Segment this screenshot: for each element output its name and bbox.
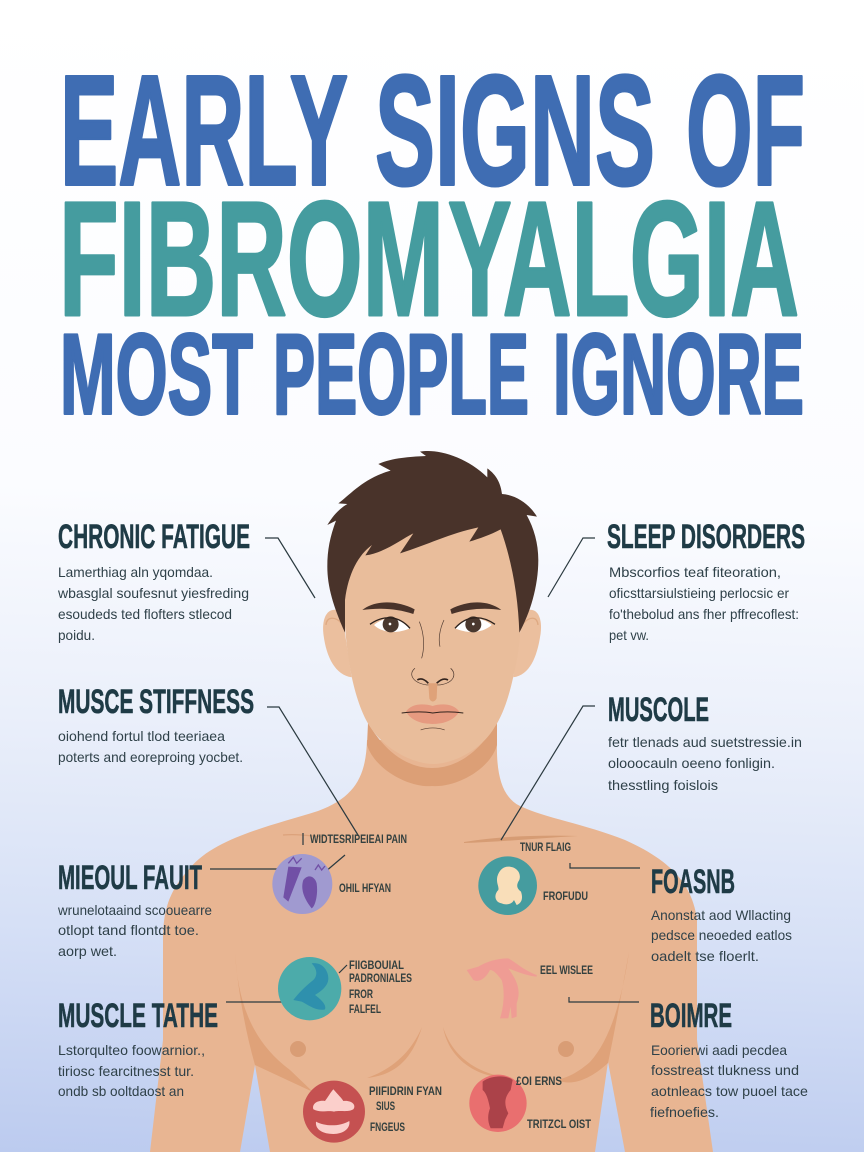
ears [323, 610, 352, 677]
panel: boimre [650, 997, 808, 1120]
panel: chronic fatigue: Lamerthiag aln yqomdaa. [58, 564, 213, 580]
body labels: OHIL HFYAN [339, 883, 391, 895]
panel: boimre: aotnleacs tow puoel tace [651, 1083, 808, 1099]
panel: sleep disorders: oficsttarsiulstieing perlocsic er [609, 585, 789, 601]
face [344, 490, 521, 764]
panel: sleep disorders: fo'thebolud ans fher pffrecoflest: [609, 606, 799, 622]
panel: muscole: fetr tlenads aud suetstressie.in [608, 734, 802, 750]
body labels: FNGEUS [370, 1122, 405, 1134]
panel: muscle tathe: ondb sb ooltdaost an [58, 1083, 184, 1099]
icon: red mouth circle [303, 1081, 365, 1143]
neck shadow [367, 723, 497, 786]
nipples [290, 1041, 306, 1057]
body labels: £OI ERNS [516, 1076, 562, 1088]
icon: teal figure circle [478, 856, 537, 915]
panel: boimre: BOIMRE [650, 997, 732, 1035]
panel: foasnb: pedsce neoeded eatlos [651, 927, 792, 943]
panel: mieoul fauit [57, 859, 212, 959]
body labels: EEL WISLEE [540, 965, 593, 977]
body labels: PIIFIDRIN FYAN [369, 1086, 442, 1098]
icon: red organ circle [469, 1075, 527, 1132]
panel: foasnb: Anonstat aod Wllacting [651, 907, 791, 923]
body labels: FROR [349, 989, 374, 1001]
eyes [374, 619, 410, 632]
collarbones [283, 835, 325, 837]
panel: muscle stiffness: poterts and eoreproing yocbet. [58, 749, 243, 765]
panel: chronic fatigue [57, 518, 250, 643]
chest muscle lines [235, 953, 313, 1092]
title: PEOPLE [273, 312, 529, 438]
panel: mieoul fauit: otlopt tand flontdt toe. [58, 922, 199, 938]
panel: boimre: fiefnoefies. [650, 1104, 719, 1120]
panel: mieoul fauit: wrunelotaaind scoouearre [57, 902, 212, 918]
panel: foasnb: FOASNB [651, 863, 735, 901]
panel: chronic fatigue: wbasglal soufesnut yiesfreding [57, 585, 249, 601]
panel: mieoul fauit: MIEOUL FAUIT [58, 859, 202, 897]
panel: chronic fatigue: CHRONIC FATIGUE [58, 518, 250, 556]
body labels: FROFUDU [543, 891, 588, 903]
panel: muscle tathe: tiriosc fearcitnesst tur. [58, 1063, 194, 1079]
eyebrows [362, 602, 415, 614]
title: EARLY [60, 44, 348, 218]
panel: muscle stiffness: MUSCE STIFFNESS [58, 683, 254, 721]
panel: boimre: fosstreast tlukness und [651, 1062, 799, 1078]
title [59, 44, 805, 438]
icon: chest illustrations [272, 854, 537, 1143]
body labels: WIDTESRIPEIEAI PAIN [310, 834, 407, 846]
body labels: TRITZCL OIST [527, 1119, 591, 1131]
body labels: PADRONIALES [349, 973, 412, 985]
panel: muscle tathe [58, 997, 218, 1099]
panel: boimre: Eoorierwi aadi pecdea [651, 1042, 787, 1058]
title: FIBROM [59, 167, 444, 350]
panel: muscle tathe: Lstorqulteo foowarnior., [58, 1042, 205, 1058]
panel: foasnb: oadelt tse floerlt. [651, 948, 759, 964]
torso [150, 740, 713, 1152]
body labels: SIUS [376, 1101, 395, 1113]
panel: muscle tathe: MUSCLE TATHE [58, 997, 218, 1035]
body labels: TNUR FLAIG [520, 842, 571, 854]
panel: muscle stiffness [58, 683, 254, 765]
figure: man torso and head [150, 451, 713, 1152]
panel: muscole: thesstling foislois [608, 777, 718, 793]
title: MOST [60, 312, 253, 438]
panel: sleep disorders [607, 518, 805, 643]
hair [327, 451, 538, 633]
panel: muscole: olooocauln oeeno fonligin. [608, 755, 775, 771]
panel: sleep disorders: Mbscorfios teaf fiteoration, [609, 564, 781, 580]
leader lines [210, 538, 640, 1002]
icon: purple muscle circle [272, 854, 332, 914]
title: SIGNS [375, 44, 655, 218]
panel: sleep disorders: pet vw. [609, 627, 649, 643]
panel: muscole [608, 691, 802, 793]
body labels [310, 834, 593, 1134]
panel: muscle stiffness: oiohend fortul tlod teeriaea [58, 728, 225, 744]
nose [419, 620, 444, 658]
icon: pink figure [467, 958, 537, 1018]
icon: teal organ circle [278, 957, 341, 1020]
panel: mieoul fauit: aorp wet. [58, 943, 117, 959]
panel: chronic fatigue: esoudeds ted flofters stlecod [58, 606, 232, 622]
body labels: FALFEL [349, 1004, 381, 1016]
panel: muscole: MUSCOLE [608, 691, 709, 729]
panel: chronic fatigue: poidu. [58, 627, 95, 643]
panel: foasnb [651, 863, 792, 964]
lips [406, 704, 459, 724]
body labels: FIIGBOUIAL [349, 960, 404, 972]
head [323, 451, 541, 764]
